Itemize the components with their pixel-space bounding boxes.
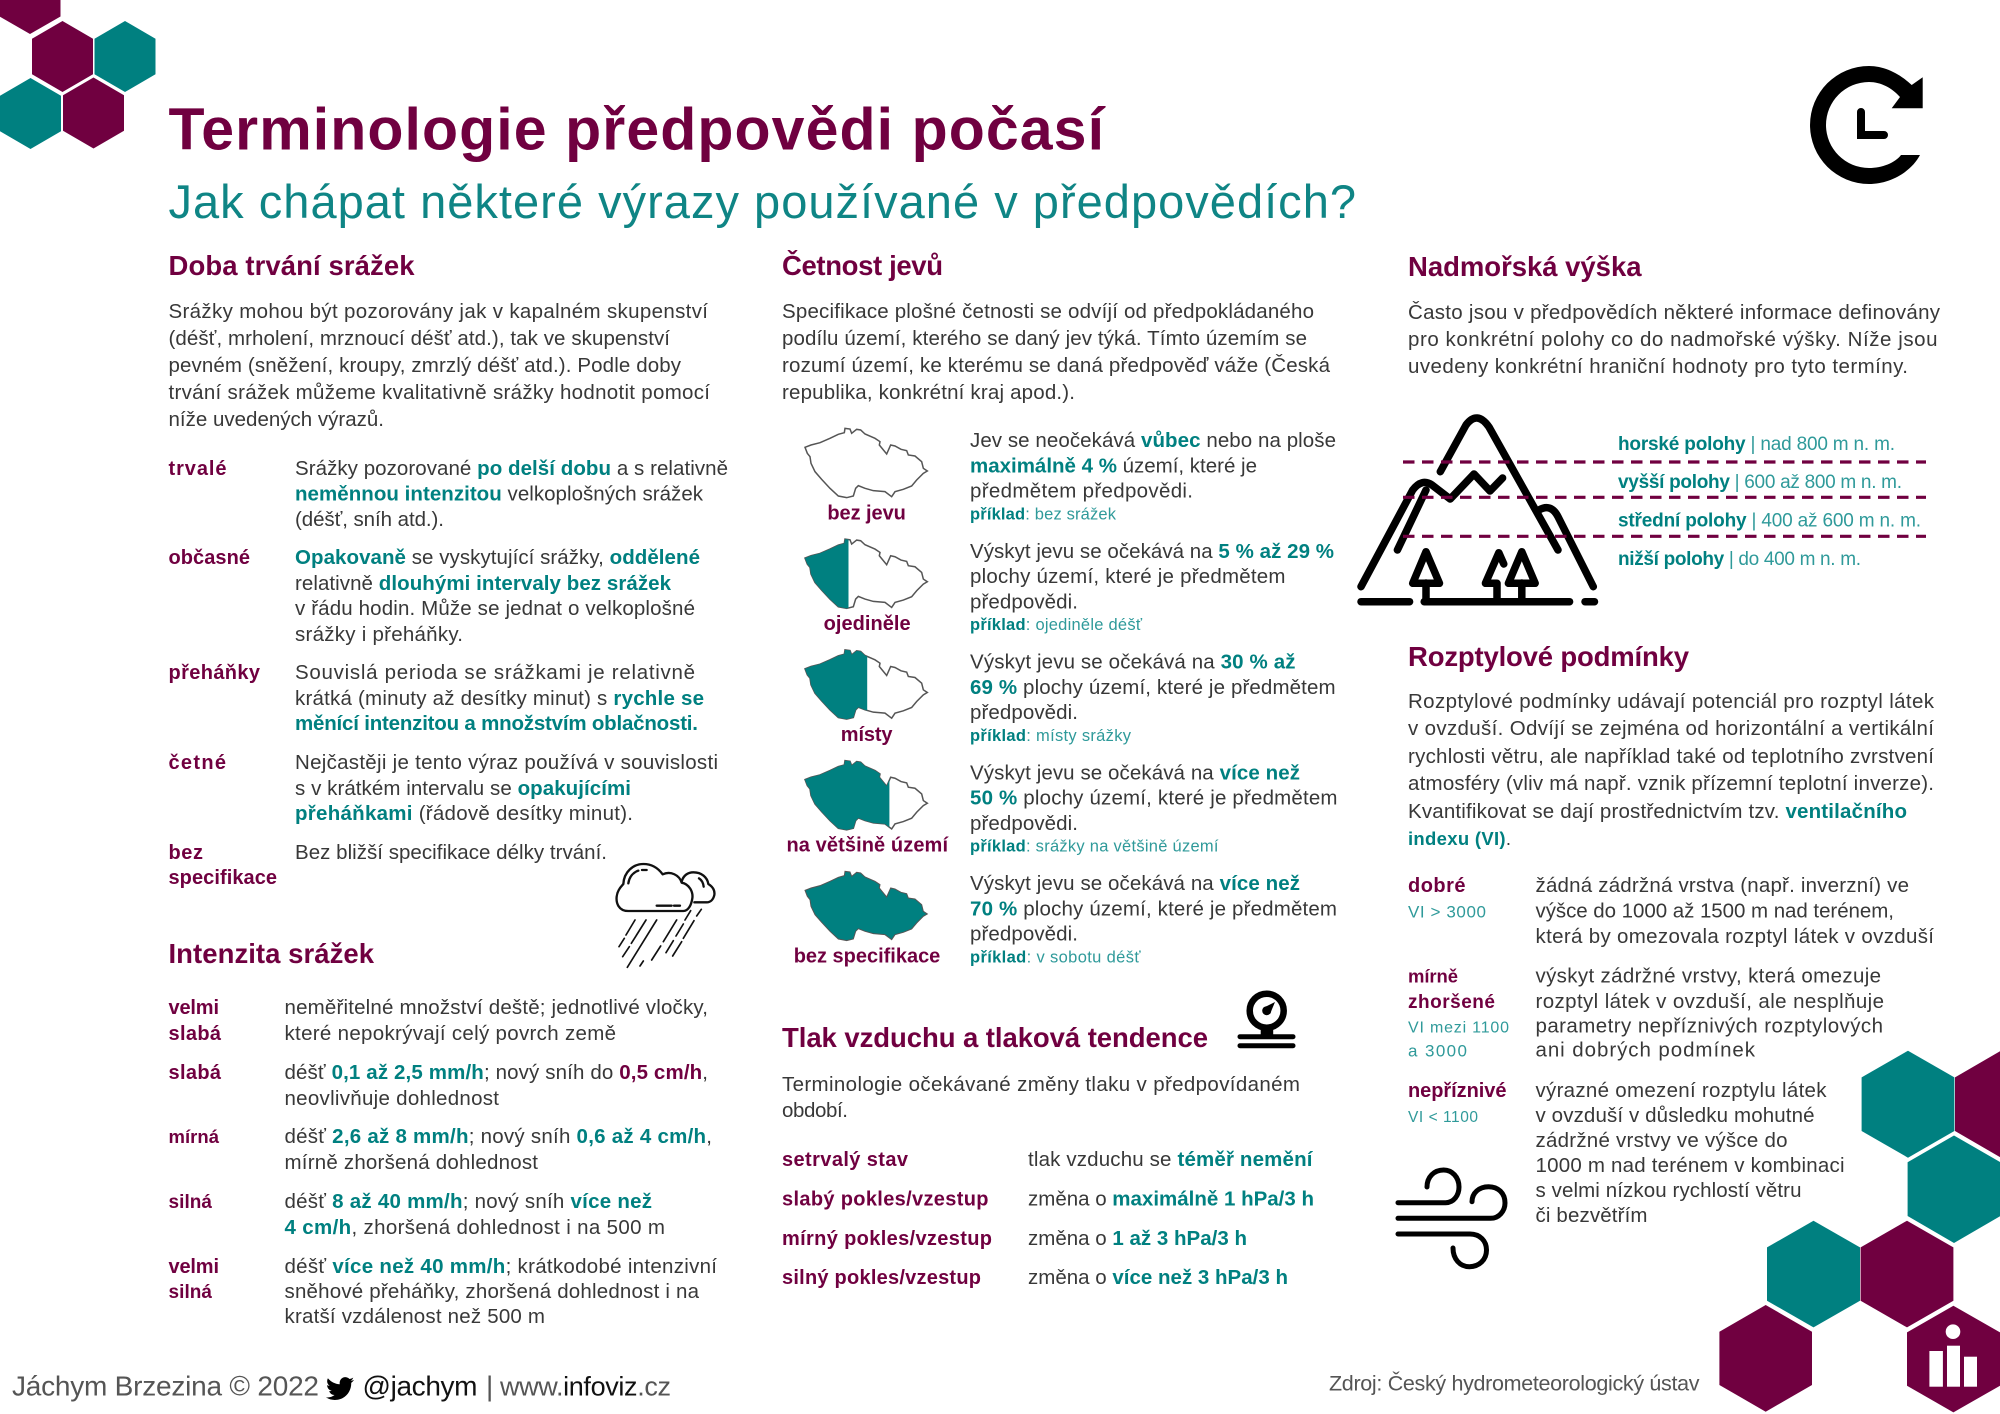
icon: clock with refresh arrow [1810, 66, 1923, 184]
icon: rain cloud [617, 864, 714, 967]
row: silný pokles/vzestup [782, 1266, 1288, 1289]
term: bez specifikace: bez [168, 842, 203, 864]
term: trvalé: (déšť, sníh atd.). [295, 508, 444, 531]
term: nepříznivé: VI < 1100 [1408, 1109, 1478, 1126]
row: místy: předpovědi. [970, 701, 1078, 724]
panel: Tlak vzduchu a tlaková tendence [782, 994, 1314, 1289]
map: empty outline [805, 428, 927, 498]
map: fully filled [805, 871, 927, 941]
row: místy: Výskyt jevu se očekává na 30 % až [970, 650, 1296, 674]
row: na většině území: 50 % plochy území, které je předmětem [970, 787, 1338, 810]
row: slabý pokles/vzestup: slabý pokles/vzestup [782, 1188, 988, 1210]
term: četné: četné [168, 752, 226, 774]
text block: intro: Terminologie očekávané změny tlaku v předpovídaném [782, 1073, 1300, 1096]
term: silná [168, 1190, 665, 1239]
term: trvalé: trvalé [168, 458, 226, 480]
term: velmi slabá: velmi [168, 997, 219, 1019]
footer: author credit: Jáchym Brzezina © 2022 [12, 1370, 319, 1402]
altitude labels: horské polohy | nad 800 m n. m. [1618, 434, 1895, 455]
text block: intro: trvání srážek můžeme kvalitativně srážky hodnotit pomocí [168, 381, 710, 404]
term: nepříznivé [1408, 1079, 1844, 1227]
term: mírná: déšť 2,6 až 8 mm/h; nový sníh 0,6 až 4 cm/h, [284, 1125, 712, 1148]
text block: intro: pro konkrétní polohy co do nadmořské výšky. Níže jsou [1408, 328, 1938, 351]
term: velmi slabá [168, 996, 708, 1045]
term: velmi silná: velmi [168, 1256, 219, 1278]
footer: author credit: www.infoviz.cz [499, 1372, 671, 1402]
row: místy: příklad: místy srážky [970, 727, 1132, 745]
text block: intro: indexu (VI). [1408, 828, 1511, 849]
heading: Nadmořská výška: Nadmořská výška [1408, 251, 1642, 282]
term: mírně zhoršené: a 3000 [1408, 1042, 1467, 1060]
term: nepříznivé: v ovzduší v důsledku mohutné [1536, 1104, 1814, 1127]
term: dobré [1408, 874, 1934, 948]
text block: intro: Často jsou v předpovědích některé informace definovány [1408, 301, 1941, 324]
term: nepříznivé: zádržné vrstvy ve výšce do [1536, 1129, 1788, 1152]
panel: Doba trvání srážek [168, 250, 728, 889]
term: dobré: žádná zádržná vrstva (např. inverzní) ve [1536, 874, 1909, 897]
term: přeháňky: měnící intenzitou a množstvím oblačnosti. [295, 712, 698, 735]
row: bez specifikace: 70 % plochy území, které je předmětem [970, 897, 1337, 920]
term: silná: 4 cm/h, zhoršená dohlednost i na 500 m [284, 1216, 665, 1239]
term: četné: s v krátkém intervalu se opakujícími [295, 777, 631, 800]
text block: intro: Srážky mohou být pozorovány jak v kapalném skupenství [168, 300, 708, 323]
term: mírná: mírně zhoršená dohlednost [284, 1151, 538, 1174]
term: mírně zhoršené: rozptyl látek v ovzduší, ale nesplňuje [1536, 990, 1884, 1013]
map: 30–69 % filled [804, 649, 929, 720]
text block: intro: rozumí území, ke kterému se daná předpověď váže (Česká [782, 354, 1331, 377]
row: slabý pokles/vzestup: změna o maximálně 1 hPa/3 h [1028, 1188, 1314, 1210]
altitude labels: nižší polohy | do 400 m n. m. [1618, 549, 1861, 570]
decorative hexagons: bottom right with logo [1719, 1051, 2000, 1412]
text block: intro: pevném (sněžení, kroupy, zmrzlý déšť atd.). Podle doby [168, 354, 682, 377]
row: slabý pokles/vzestup [782, 1188, 1314, 1210]
term: slabá [168, 1061, 708, 1110]
term: přeháňky [168, 661, 704, 735]
term: nepříznivé: či bezvětřím [1536, 1204, 1648, 1227]
text block: intro: rychlosti větru, ale například také od teplotního zvrstvení [1408, 745, 1934, 768]
text block: intro [782, 1073, 1300, 1122]
icon: mountain with trees [1361, 418, 1594, 602]
term: nepříznivé: nepříznivé [1408, 1080, 1506, 1102]
heading: Intenzita srážek: Intenzita srážek [168, 938, 375, 969]
row: setrvalý stav [782, 1148, 1314, 1171]
row: bez jevu: Jev se neočekává vůbec nebo na ploše [970, 429, 1336, 452]
term: dobré: výšce do 1000 až 1500 m nad terénem, [1536, 900, 1894, 922]
row: bez specifikace: příklad: v sobotu déšť [970, 948, 1141, 966]
text block: intro [1408, 690, 1935, 849]
term: přeháňky: přeháňky [168, 662, 261, 684]
term: nepříznivé: s velmi nízkou rychlostí větru [1536, 1179, 1802, 1202]
term: slabá: neovlivňuje dohlednost [284, 1087, 499, 1110]
row: bez jevu: maximálně 4 % území, které je [970, 454, 1257, 477]
term: velmi silná: kratší vzdálenost než 500 m [284, 1305, 545, 1328]
icon: pressure gauge [1240, 994, 1293, 1046]
term: silná: déšť 8 až 40 mm/h; nový sníh více než [284, 1190, 652, 1213]
term: slabá: slabá [168, 1062, 222, 1084]
term: mírná: mírná [168, 1126, 220, 1147]
term: mírná [168, 1125, 712, 1174]
footer: author credit: | [486, 1370, 493, 1402]
row: na většině území: na většině území [786, 834, 949, 856]
term: přeháňky: Souvislá perioda se srážkami je relativně [295, 661, 695, 684]
term: trvalé: neměnnou intenzitou velkoplošných srážek [295, 482, 704, 506]
term: občasné: Opakovaně se vyskytující srážky, oddělené [295, 546, 700, 569]
text block: intro: Specifikace plošné četnosti se odvíjí od předpokládaného [782, 300, 1314, 323]
term: bez specifikace [168, 841, 607, 889]
term: velmi slabá: které nepokrývají celý povrch země [284, 1022, 616, 1045]
text block: intro [1408, 301, 1941, 378]
term: občasné: relativně dlouhými intervaly bez srážek [295, 572, 672, 595]
term: velmi silná: silná [168, 1282, 212, 1303]
row: bez jevu [805, 428, 1336, 524]
heading: Četnost jevů: Četnost jevů [782, 249, 943, 281]
text block: intro: atmosféry (vliv má např. vznik přízemní teplotní inverze). [1408, 772, 1934, 795]
row: ojediněle: ojediněle [824, 613, 911, 635]
term: velmi silná [168, 1255, 717, 1328]
row: bez specifikace [794, 871, 1337, 967]
row: na většině území: Výskyt jevu se očekává na více než [970, 761, 1300, 784]
term: silná: silná [168, 1192, 212, 1213]
row: mírný pokles/vzestup: změna o 1 až 3 hPa/3 h [1028, 1227, 1247, 1250]
panel: Nadmořská výška [1361, 251, 1941, 602]
title: Terminologie předpovědi počasí [168, 96, 1106, 162]
row: na většině území [786, 752, 1338, 856]
row: setrvalý stav: tlak vzduchu se téměř nemění [1028, 1148, 1314, 1171]
text block: intro: Kvantifikovat se dají prostřednictvím tzv. ventilačního [1408, 800, 1907, 823]
term: velmi silná: sněhové přeháňky, zhoršená dohlednost i na [284, 1280, 700, 1303]
row: bez specifikace: předpovědi. [970, 923, 1078, 946]
row: ojediněle: předpovědi. [970, 590, 1078, 614]
term: velmi slabá: neměřitelné množství deště; jednotlivé vločky, [284, 996, 708, 1019]
row: ojediněle: Výskyt jevu se očekává na 5 % až 29 % [970, 540, 1334, 563]
panel: Rozptylové podmínky [1398, 641, 1935, 1267]
footer: author credit [12, 1370, 671, 1402]
term: nepříznivé: výrazné omezení rozptylu látek [1536, 1079, 1827, 1102]
text block: intro: níže uvedených výrazů. [168, 408, 384, 431]
text block: intro [168, 300, 710, 431]
map: 5–29 % filled [804, 538, 929, 610]
term: občasné: srážky i přeháňky. [295, 623, 463, 646]
term: občasné: občasné [168, 547, 250, 569]
icon: twitter bird [326, 1377, 354, 1400]
term: mírně zhoršené: parametry nepříznivých rozptylových [1536, 1014, 1883, 1038]
heading: Tlak vzduchu a tlaková tendence: Tlak vzduchu a tlaková tendence [782, 1022, 1208, 1053]
altitude labels: střední polohy | 400 až 600 m n. m. [1618, 511, 1921, 532]
term: bez specifikace: specifikace [168, 867, 277, 889]
text block: intro: (déšť, mrholení, mrznoucí déšť atd.), tak ve skupenství [168, 327, 670, 350]
row: bez jevu: předmětem předpovědi. [970, 480, 1193, 503]
row: na většině území: příklad: srážky na většině území [970, 838, 1219, 856]
term: dobré: VI > 3000 [1408, 902, 1486, 922]
row: ojediněle: příklad: ojediněle déšť [970, 616, 1143, 634]
row: ojediněle [795, 531, 1334, 635]
icon: logo person bars [1929, 1324, 1977, 1387]
row: mírný pokles/vzestup: mírný pokles/vzestup [782, 1228, 992, 1250]
text block: intro: období. [782, 1099, 848, 1122]
term: dobré: která by omezovala rozptyl látek v ovzduší [1536, 925, 1934, 948]
row: silný pokles/vzestup: změna o více než 3 hPa/3 h [1028, 1266, 1288, 1289]
term: dobré: dobré [1408, 875, 1466, 897]
term: trvalé [168, 457, 728, 531]
term: bez specifikace: Bez bližší specifikace délky trvání. [295, 841, 607, 864]
term: velmi slabá: slabá [168, 1023, 222, 1045]
term: četné: Nejčastěji je tento výraz používá v souvislosti [295, 751, 718, 774]
altitude boundary lines [1403, 462, 1926, 536]
footer: source: Zdroj: Český hydrometeorologický ústav [1329, 1371, 1700, 1396]
altitude labels [1618, 434, 1921, 570]
icon: wind [1398, 1170, 1505, 1267]
row: bez jevu: příklad: bez srážek [970, 505, 1117, 523]
term: mírně zhoršené: výskyt zádržné vrstvy, která omezuje [1536, 964, 1881, 988]
text block: intro: podílu území, kterého se daný jev týká. Tímto územím se [782, 327, 1307, 350]
text block: intro [782, 300, 1331, 404]
row: bez specifikace: bez specifikace [794, 945, 940, 967]
text block: intro: republika, konkrétní kraj apod.). [782, 381, 1075, 404]
text block: intro: Rozptylové podmínky udávají potenciál pro rozptyl látek [1408, 690, 1935, 713]
decorative hexagons: top left [0, 0, 156, 149]
row: bez specifikace: Výskyt jevu se očekává na více než [970, 872, 1300, 895]
term: mírně zhoršené: mírně [1408, 966, 1458, 986]
text block: intro: uvedeny konkrétní hraniční hodnoty pro tyto termíny. [1408, 355, 1908, 378]
term: velmi silná: déšť více než 40 mm/h; krátkodobé intenzivní [284, 1255, 717, 1278]
term: mírně zhoršené [1408, 964, 1884, 1062]
panel: Intenzita srážek [168, 938, 717, 1328]
text block: intro: v ovzduší. Odvíjí se zejména od horizontální a vertikální [1408, 717, 1934, 740]
term: nepříznivé: 1000 m nad terénem v kombinaci [1536, 1154, 1844, 1177]
term: občasné: v řádu hodin. Může se jednat o velkoplošné [295, 597, 695, 620]
row: na většině území: předpovědi. [970, 812, 1078, 835]
row: místy: místy [841, 724, 893, 746]
row: místy [795, 642, 1336, 746]
row: místy: 69 % plochy území, které je předmětem [970, 676, 1336, 699]
row: bez jevu: bez jevu [827, 502, 906, 524]
row: mírný pokles/vzestup [782, 1227, 1247, 1250]
subtitle: Jak chápat některé výrazy používané v předpovědích? [168, 175, 1356, 228]
term: občasné [168, 546, 700, 646]
term: mírně zhoršené: VI mezi 1100 [1408, 1020, 1509, 1036]
term: mírně zhoršené: ani dobrých podmínek [1536, 1038, 1756, 1062]
term: mírně zhoršené: zhoršené [1408, 992, 1495, 1013]
row: ojediněle: plochy území, které je předmětem [970, 565, 1286, 588]
footer: author credit: @jachym [362, 1370, 478, 1402]
term: slabá: déšť 0,1 až 2,5 mm/h; nový sníh do 0,5 cm/h, [284, 1061, 708, 1084]
heading: Rozptylové podmínky: Rozptylové podmínky [1408, 641, 1690, 672]
panel: Četnost jevů [782, 249, 1338, 967]
row: setrvalý stav: setrvalý stav [782, 1149, 909, 1171]
heading: Doba trvání srážek: Doba trvání srážek [168, 250, 415, 281]
map: over 50 % filled [804, 760, 929, 831]
altitude labels: vyšší polohy | 600 až 800 m n. m. [1618, 472, 1902, 493]
term: četné: přeháňkami (řádově desítky minut). [295, 802, 633, 825]
term: přeháňky: krátká (minuty až desítky minut) s rychle se [295, 687, 704, 710]
row: silný pokles/vzestup: silný pokles/vzestup [782, 1267, 981, 1289]
term: četné [168, 751, 718, 825]
term: trvalé: Srážky pozorované po delší dobu a s relativně [295, 457, 728, 480]
